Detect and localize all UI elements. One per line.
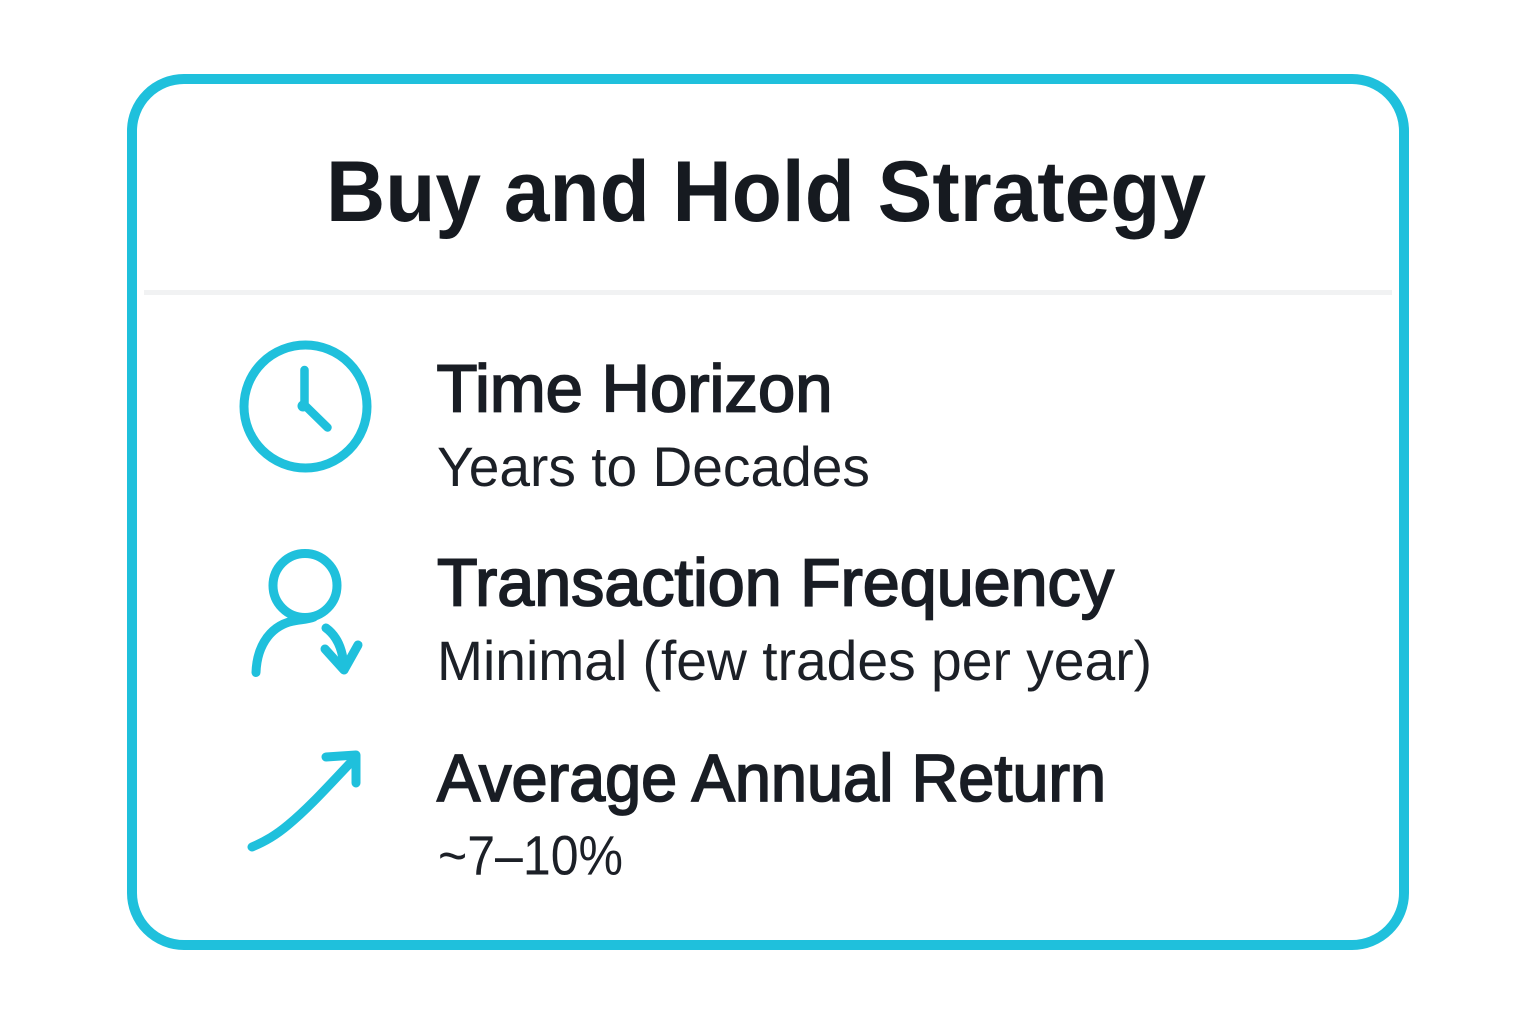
icon: growth arrow (252, 755, 356, 847)
text: average annual return heading: Average Annual Return (437, 741, 1106, 816)
text: time horizon value: Years to Decades (437, 435, 870, 498)
panel: card (132, 79, 1404, 945)
icon: person with down arrow (256, 554, 358, 672)
icon: clock (244, 345, 367, 468)
title: Buy and Hold Strategy (326, 144, 1206, 240)
text: transaction frequency value: Minimal (few trades per year) (437, 629, 1152, 692)
text: transaction frequency heading: Transaction Frequency (437, 546, 1114, 620)
text: average annual return value: ~7–10% (438, 824, 623, 886)
text: time horizon heading: Time Horizon (436, 352, 832, 426)
